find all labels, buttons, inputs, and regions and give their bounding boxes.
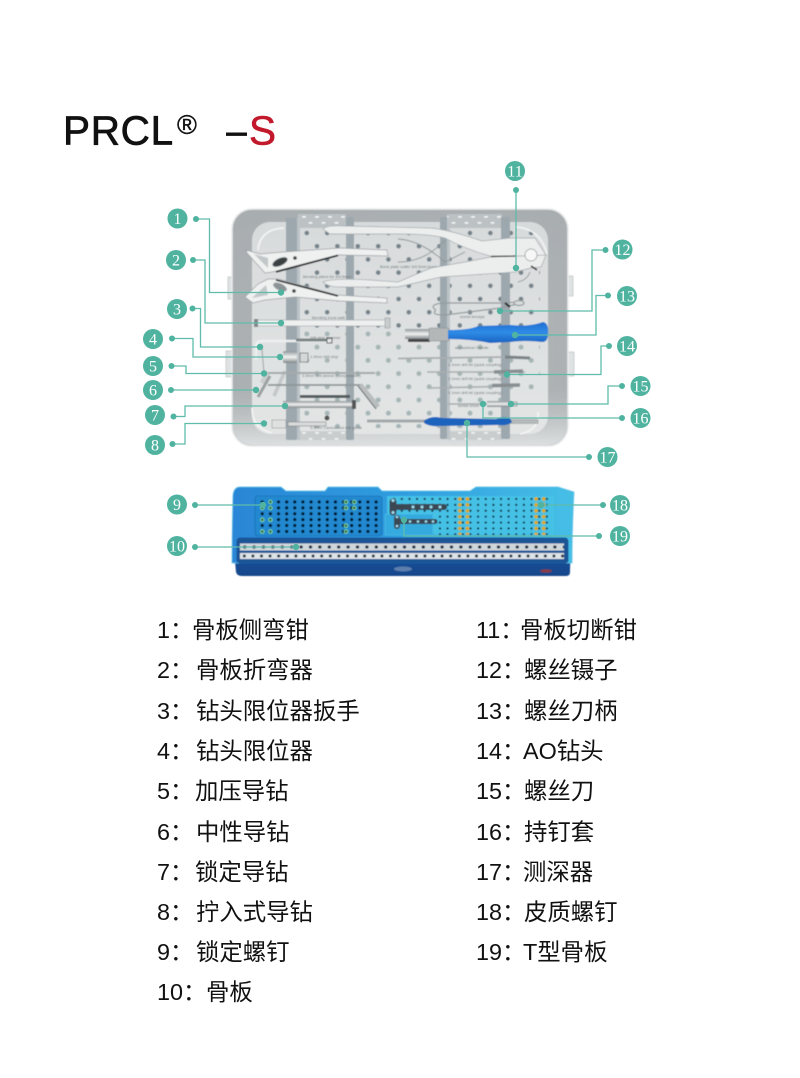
item 14 <box>476 738 604 764</box>
leader 14: 14 <box>619 338 635 356</box>
tiny tray labels: drill stop spanner <box>310 335 341 340</box>
item 11: 11： <box>476 617 524 643</box>
leader 8: 8 <box>151 438 159 454</box>
box front <box>232 530 571 576</box>
item 12: 螺丝镊子 <box>524 657 618 683</box>
screw forceps <box>433 300 524 315</box>
depth gauge <box>367 417 538 426</box>
leader 18 <box>538 495 630 515</box>
instrument tray <box>226 209 574 446</box>
locking screws <box>261 500 356 533</box>
bracket rails <box>286 217 510 440</box>
tiny tray labels: Bending pliers for 3/4.5mm <box>303 274 351 279</box>
item 19: T型骨板 <box>523 939 607 965</box>
item 12: 12： <box>476 657 525 683</box>
item 16 <box>476 819 594 845</box>
item 9: 9： <box>157 939 193 965</box>
leader 12 <box>497 240 632 314</box>
bone plate cutter <box>323 226 546 287</box>
leader 4 <box>143 329 283 360</box>
top and bottom slot strips <box>298 214 502 440</box>
leader 15: 15 <box>632 378 648 396</box>
blue screwdriver handle <box>405 322 548 343</box>
title <box>63 108 276 154</box>
tiny tray labels: Bending irons walt <box>312 315 346 320</box>
implant box <box>232 487 574 576</box>
tiny tray labels <box>302 264 503 430</box>
tiny tray labels: screwdriver handle <box>455 345 489 350</box>
item 18 <box>476 899 618 925</box>
item 19 <box>476 939 607 965</box>
tiny tray labels: 3.5mm drill sleeve (compression) <box>302 373 361 378</box>
box logo <box>394 566 412 572</box>
leader 1 <box>168 208 284 296</box>
tiny tray labels: 3.1mm drill bit (quick coupling) <box>448 390 503 395</box>
item 7: 7： <box>157 859 193 885</box>
item 5: 加压导钻 <box>195 778 289 804</box>
right recessed panel <box>387 496 554 535</box>
leader 17: 17 <box>600 450 616 466</box>
item 16: 持钉套 <box>524 819 594 845</box>
item 12 <box>476 657 618 683</box>
leader 11: 11 <box>507 164 523 180</box>
leader 5 <box>143 356 267 377</box>
item 7: 锁定导钻 <box>195 859 289 885</box>
white corner curves <box>252 227 547 434</box>
legend left column <box>157 617 360 1005</box>
tiny tray labels: Bone plate cutter 3/4.5mm bone plate <box>380 264 447 269</box>
leader 2 <box>166 250 284 326</box>
item 13 <box>476 698 618 724</box>
bone plate side bending pliers <box>245 248 388 303</box>
leader 2: 2 <box>172 252 180 270</box>
item 3: 3： <box>157 698 193 724</box>
item 16: 16： <box>476 819 525 845</box>
tray floor <box>252 222 548 434</box>
legend right column <box>476 617 637 965</box>
item 17: 17： <box>476 859 525 885</box>
item 15: 螺丝刀 <box>524 778 594 804</box>
tiny tray labels: 3.1mm drill bit (quick coupling) <box>448 376 503 381</box>
item 6: 中性导钻 <box>196 819 290 845</box>
leader 10: 10 <box>169 538 185 556</box>
leader 16: 16 <box>632 410 648 428</box>
leader 6 <box>143 380 259 400</box>
tiny tray labels: 1.9mm drill stop <box>310 354 339 359</box>
item 10 <box>157 979 253 1005</box>
leader 9 <box>167 494 266 514</box>
plate trough <box>237 538 568 563</box>
leader 7: 7 <box>151 408 159 424</box>
item 1: 骨板侧弯钳 <box>192 617 309 643</box>
item 9: 锁定螺钉 <box>196 939 290 965</box>
screw driver <box>448 401 517 407</box>
second spring wires <box>398 239 530 282</box>
leader 1: 1 <box>174 211 182 228</box>
leader 16 <box>480 401 650 428</box>
tiny tray labels: screw driver <box>458 403 480 408</box>
item 8: 拧入式导钻 <box>196 899 313 925</box>
title: S <box>249 108 276 154</box>
cortical screws <box>456 496 548 535</box>
tray handles <box>226 276 574 377</box>
left recessed panel <box>255 496 382 536</box>
leader 19: 19 <box>612 528 628 546</box>
item 10: 10： <box>157 979 206 1005</box>
cannulated drill guide <box>272 416 330 428</box>
drill stop <box>283 351 308 363</box>
item 4: 钻头限位器 <box>196 738 313 764</box>
drill stop spanner <box>256 338 332 372</box>
leader 7 <box>145 403 288 425</box>
T plate small <box>396 516 435 527</box>
leader 15 <box>508 376 650 407</box>
T plate large <box>392 499 444 514</box>
item 6: 6： <box>157 819 193 845</box>
item 4: 4： <box>157 738 193 764</box>
box top <box>232 487 574 563</box>
item 8: 8： <box>157 899 193 925</box>
leader 13: 13 <box>619 288 635 306</box>
tiny tray labels: 3.1mm drill bit (quick coupling) <box>448 362 503 367</box>
right screw holes <box>437 496 549 535</box>
threaded drill guide <box>283 395 356 409</box>
item 1: 1： <box>157 617 193 643</box>
leader 4: 4 <box>149 332 157 348</box>
tiny tray labels: screw forceps <box>460 314 485 319</box>
item 5: 5： <box>157 778 193 804</box>
title: PRCL <box>63 108 174 154</box>
leader 18: 18 <box>612 498 628 514</box>
item 15: 15： <box>476 778 525 804</box>
leader 3: 3 <box>173 302 181 318</box>
perforated holes <box>298 230 540 428</box>
drill sleeves <box>258 371 378 409</box>
item 11: 骨板切断钳 <box>520 617 637 643</box>
item 15 <box>476 778 594 804</box>
item 18: 皮质螺钉 <box>524 899 618 925</box>
tray body <box>232 209 568 446</box>
leader 8 <box>145 420 267 455</box>
leader 19 <box>401 517 630 546</box>
leader 14 <box>504 336 637 378</box>
item 3: 钻头限位器扳手 <box>196 698 360 724</box>
item 19: 19： <box>476 939 525 965</box>
leader 5: 5 <box>149 358 157 376</box>
leader 13 <box>512 286 637 338</box>
bone plate bending iron <box>254 318 390 328</box>
item 2: 骨板折弯器 <box>196 657 313 683</box>
item 17 <box>476 859 593 885</box>
item 18: 18： <box>476 899 525 925</box>
bone plates <box>240 542 564 560</box>
leader 10 <box>167 536 299 556</box>
leader 3 <box>167 299 263 350</box>
drill bits <box>398 357 530 388</box>
item 14: AO钻头 <box>523 738 604 764</box>
item 14: 14： <box>476 738 525 764</box>
item 13: 螺丝刀柄 <box>524 698 618 724</box>
leader 17 <box>464 420 618 467</box>
leader 12: 12 <box>614 242 630 259</box>
item 13: 13： <box>476 698 525 724</box>
box red dot <box>540 569 552 573</box>
leader 11 <box>505 161 525 271</box>
leader 9: 9 <box>173 497 181 514</box>
item 10: 骨板 <box>206 979 253 1005</box>
item 2: 2： <box>157 657 193 683</box>
title: ® <box>177 110 197 140</box>
leader 6: 6 <box>149 382 157 400</box>
item 17: 测深器 <box>523 859 593 885</box>
tiny tray labels: 3.5mm Cannulated drill guide <box>310 425 363 430</box>
left screw holes <box>258 499 380 535</box>
